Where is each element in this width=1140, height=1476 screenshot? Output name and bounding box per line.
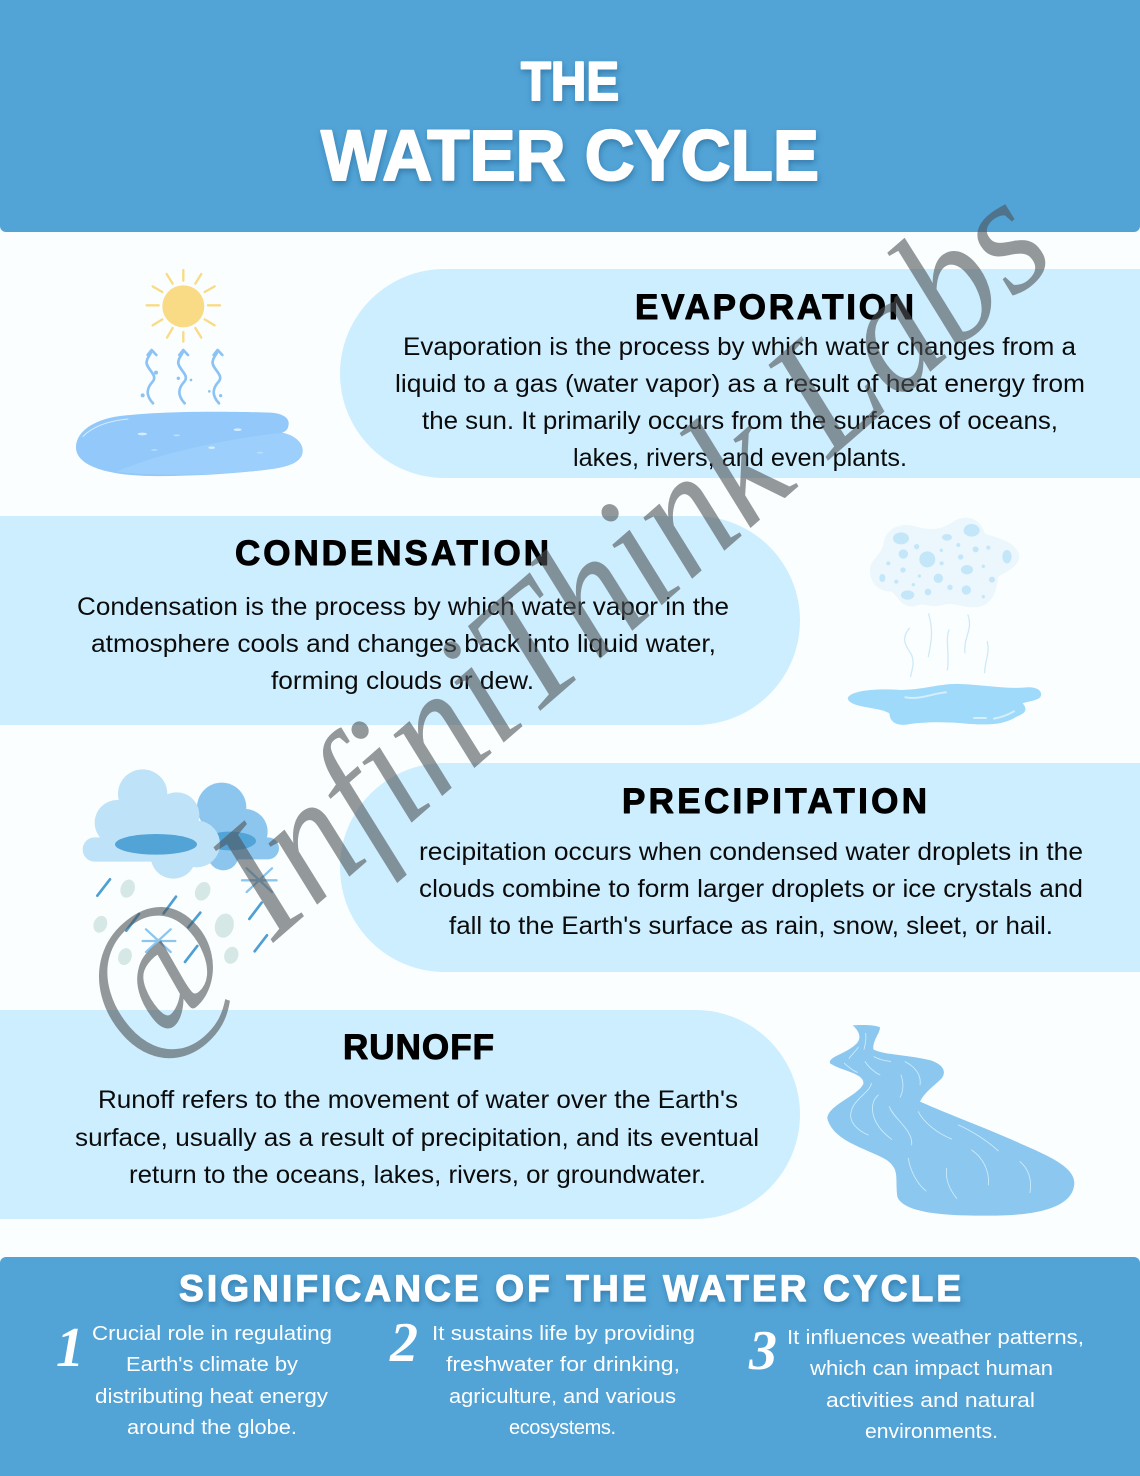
text: condensation description: Condensation is the process by which water vapor in the: [77, 593, 729, 621]
icon: sun: [147, 270, 220, 342]
panel: condensation: [0, 516, 800, 725]
icon: back cloud: [197, 783, 279, 870]
heading: runoff: RUNOFF: [343, 1028, 494, 1067]
text: runoff description: [75, 1086, 759, 1189]
point 3: which can impact human: [809, 1358, 1053, 1380]
text: condensation description: [77, 593, 729, 695]
text: evaporation description: the sun. It primarily occurs from the surfaces of oceans,: [422, 407, 1058, 435]
number 1: 1: [56, 1317, 84, 1379]
number 3: 3: [748, 1320, 777, 1382]
point 1: distributing heat energy: [95, 1386, 328, 1408]
point 1: Earth's climate by: [126, 1354, 298, 1376]
point 3: environments.: [865, 1421, 998, 1443]
heading: condensation: CONDENSATION: [235, 534, 549, 573]
point 3: [748, 1320, 1084, 1443]
point 2: agriculture, and various: [449, 1386, 676, 1408]
icon: front cloud: [83, 769, 220, 879]
text: evaporation description: Evaporation is the process by which water changes from a: [403, 333, 1076, 361]
icon: sun and evaporating pond: [76, 270, 303, 476]
watermark: @ InfiniThink Labs: [36, 145, 1084, 1091]
point 1: Crucial role in regulating: [92, 1323, 332, 1345]
text: precipitation description: fall to the Earth's surface as rain, snow, sleet, or hail.: [449, 912, 1053, 940]
text: runoff description: surface, usually as a result of precipitation, and its eventual: [75, 1124, 759, 1152]
icon: speckled cloud: [870, 518, 1019, 607]
text: runoff description: return to the oceans, lakes, rivers, or groundwater.: [129, 1161, 706, 1189]
icon: river: [827, 1025, 1074, 1216]
panel: evaporation: [340, 269, 1140, 478]
text: precipitation description: [419, 838, 1083, 940]
text: runoff description: Runoff refers to the movement of water over the Earth's: [98, 1086, 738, 1114]
point 1: around the globe.: [127, 1417, 297, 1439]
text: evaporation description: liquid to a gas (water vapor) as a result of heat energy from: [395, 370, 1085, 398]
number 2: 2: [389, 1312, 418, 1374]
text: evaporation description: [395, 333, 1085, 472]
panel: runoff: [0, 1010, 800, 1219]
icon: puddle: [848, 684, 1041, 725]
text: precipitation description: recipitation occurs when condensed water droplets in the: [419, 838, 1083, 866]
heading: evaporation: EVAPORATION: [635, 288, 914, 327]
point 2: ecosystems.: [509, 1417, 616, 1439]
text: condensation description: atmosphere cools and changes back into liquid water,: [91, 630, 716, 658]
icon: vapor lines: [905, 614, 988, 677]
heading: precipitation: PRECIPITATION: [622, 782, 927, 821]
title: [321, 50, 819, 196]
icon: cloud over puddle: [848, 518, 1041, 725]
icon: rain and snow: [91, 868, 277, 967]
icon: rising vapor arrows: [141, 350, 222, 403]
point 2: It sustains life by providing: [432, 1323, 695, 1345]
point 3: It influences weather patterns,: [787, 1327, 1084, 1349]
text: precipitation description: clouds combine to form larger droplets or ice crystals and: [419, 875, 1083, 903]
point 2: freshwater for drinking,: [446, 1354, 680, 1376]
heading: significance: SIGNIFICANCE OF THE WATER CYCLE: [179, 1268, 961, 1309]
icon: rain clouds: [83, 769, 279, 967]
point 2: [389, 1312, 695, 1439]
point 3: activities and natural: [826, 1390, 1035, 1412]
icon: pond: [76, 412, 303, 476]
panel: significance of the water cycle: [0, 1257, 1140, 1476]
point 1: [56, 1317, 332, 1439]
title: THE: [521, 50, 619, 112]
text: evaporation description: lakes, rivers, and even plants.: [573, 444, 907, 472]
title: WATER CYCLE: [321, 117, 819, 196]
header banner: [0, 0, 1140, 232]
text: condensation description: forming clouds or dew.: [271, 667, 534, 695]
panel: precipitation: [340, 763, 1140, 972]
